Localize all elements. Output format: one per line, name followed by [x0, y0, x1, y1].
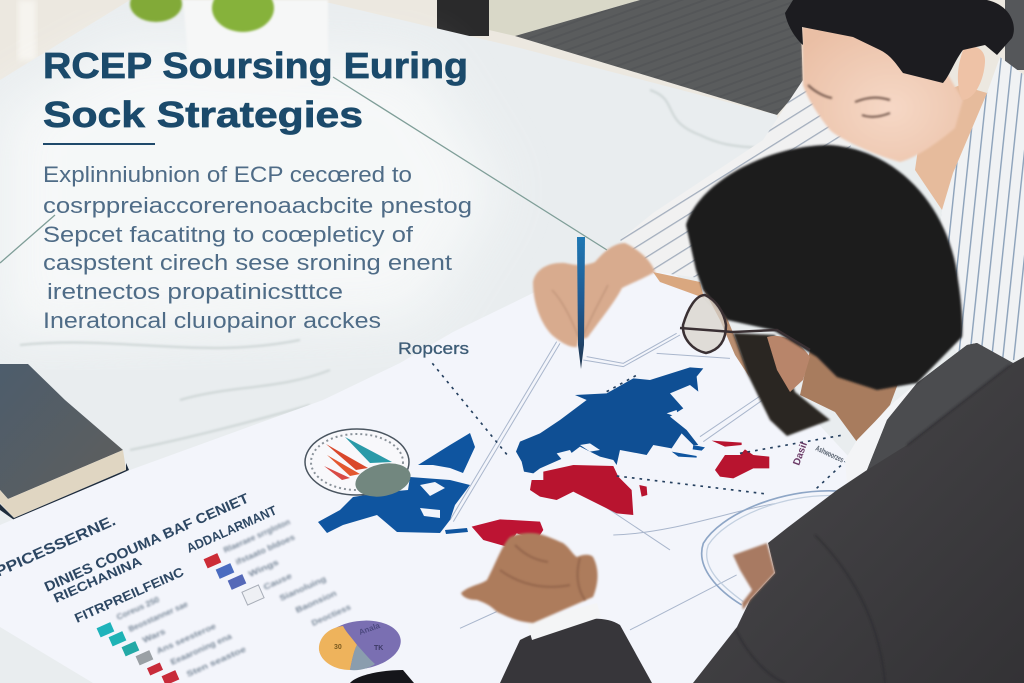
plant pot with greenery	[130, 0, 328, 93]
hair	[686, 145, 962, 390]
small legend labels: Sten seastoe	[185, 644, 248, 679]
callout label: Ropcers: Ropcers	[398, 339, 469, 358]
blue region: coast stripes	[672, 445, 705, 458]
small legend labels: Beosstanner sae	[127, 599, 190, 634]
blue region: large landmass	[516, 367, 703, 473]
neck	[800, 350, 905, 442]
dashed route lines	[432, 363, 845, 494]
beard	[733, 333, 830, 436]
small legend labels: Wars	[141, 627, 167, 645]
ear	[767, 336, 810, 392]
red region: central landmass	[530, 465, 633, 515]
phone at bottom edge	[350, 670, 414, 683]
heading: section one: FITRPREILFEINC	[72, 564, 187, 626]
person: man in suit	[461, 145, 1024, 683]
legend swatches	[97, 553, 264, 683]
finger shading	[552, 285, 608, 336]
facial features	[808, 85, 890, 117]
pie chart: TK	[374, 645, 383, 652]
map: world regions	[432, 363, 845, 547]
neck	[915, 85, 987, 210]
small legend labels: Sianoluing	[278, 574, 328, 603]
small legend labels: Coreus 250	[115, 595, 161, 622]
body text: Sepcet facatitng to coœpleticy of	[43, 222, 414, 247]
body text	[43, 162, 472, 333]
seal emblem	[305, 429, 414, 501]
route lines on map	[450, 333, 837, 630]
small legend labels: Ans seesteroe	[155, 621, 218, 656]
shirt cuff	[527, 603, 601, 640]
left sleeve	[500, 619, 652, 683]
small legend labels: Eeaaroning ena	[169, 632, 234, 667]
small legend labels	[115, 517, 353, 679]
small legend labels: ifstaato bldoes	[234, 532, 297, 567]
body text: caspstent cirech sese sroning enent	[43, 250, 452, 275]
heading: sub: RIECHANINA	[51, 553, 145, 606]
red region: small islands	[639, 441, 742, 497]
small legend labels: Deoctiess	[310, 602, 353, 628]
map: western landmass	[318, 433, 475, 534]
shirt sleeve	[620, 80, 855, 278]
red region: eastern landmass	[715, 449, 769, 478]
small legend labels: Baonsion	[294, 589, 338, 615]
person: woman in striped shirt	[533, 0, 1024, 369]
body text: Explinniubnion of ECP cecœred to	[43, 162, 412, 187]
small legend labels: Cause	[262, 571, 294, 592]
body text: cosrppreiaccorerenoaacbcite pnestog	[43, 193, 472, 218]
right hand	[733, 543, 775, 610]
blue region: inlets	[557, 410, 678, 459]
hair	[785, 0, 1014, 83]
heading: country: DINIES COOUMA BAF CENIET	[42, 490, 251, 595]
small map label: purple: Dasil	[791, 441, 810, 467]
book on table	[0, 364, 129, 522]
title rule	[43, 143, 155, 145]
shirt collar	[845, 347, 960, 483]
pie chart: 30	[334, 644, 342, 651]
title	[43, 45, 468, 135]
knuckle shading	[500, 545, 585, 600]
small map label: grey: Ashwoorzes	[814, 444, 845, 465]
red region: lower landmass	[472, 519, 543, 547]
pie chart	[316, 616, 404, 674]
western landmass inlets	[420, 482, 445, 518]
hand with pen	[533, 243, 655, 347]
heading: section two: ADDALARMANT	[184, 503, 279, 556]
paper: printed map sheet	[0, 245, 870, 683]
shirt body	[930, 57, 1024, 360]
suit jacket	[693, 343, 1024, 683]
small legend labels: Rlaeraee srrgloton	[222, 517, 292, 555]
pen	[577, 237, 585, 369]
ear	[958, 47, 985, 100]
background: room behind table	[0, 0, 1024, 130]
body text: Ineratoncal cluıopainor acckes	[43, 308, 381, 333]
small legend labels: Wings	[247, 557, 281, 579]
title: Sock Strategies	[43, 94, 363, 135]
title: RCEP Soursing Euring	[43, 45, 468, 86]
forearm under sleeve	[653, 272, 704, 298]
rotated printed text block	[0, 490, 279, 626]
face	[802, 27, 963, 162]
lapel	[867, 343, 1013, 470]
body text: iretnectos propatinicstttce	[47, 279, 343, 304]
suit seams	[736, 365, 1010, 683]
hand on map	[461, 533, 598, 623]
glasses	[680, 295, 810, 353]
face	[703, 288, 750, 378]
pie chart: Anala	[358, 621, 382, 637]
